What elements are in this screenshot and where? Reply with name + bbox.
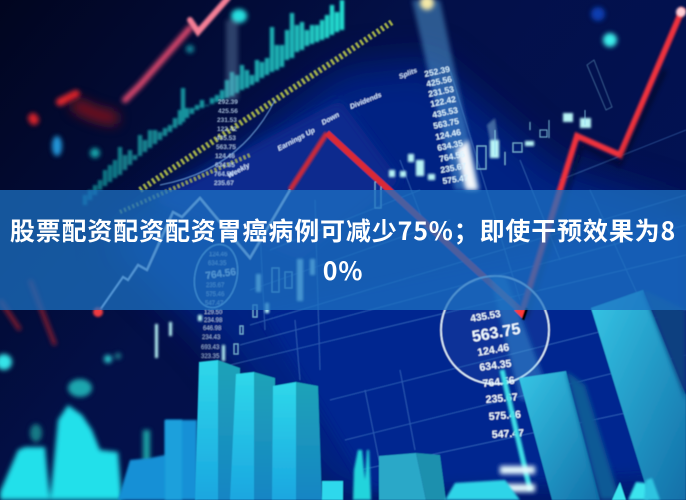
candlesticks xyxy=(155,113,591,361)
blue chart panel xyxy=(110,60,686,500)
circled number lens, small: 124.46 xyxy=(209,252,228,258)
circled number lens, large: 435.53 xyxy=(470,309,502,325)
glowing number column: 563.75 xyxy=(432,116,460,131)
circled number lens, large xyxy=(441,275,552,490)
circled number lens, small: 634.35 xyxy=(208,261,227,267)
glowing number column: 124.46 xyxy=(434,127,462,142)
glowing number column: 231.53 xyxy=(427,84,455,99)
glowing number column: 235.67 xyxy=(214,180,234,187)
circled number lens, large: 235.67 xyxy=(485,391,518,406)
big red trend line xyxy=(0,7,686,345)
circled number lens, small: 234.43 xyxy=(202,335,221,341)
large middle bar xyxy=(519,371,600,500)
glowing number column: 435.53 xyxy=(216,135,236,142)
circled number lens, small: 764.56 xyxy=(205,267,237,282)
glowing number column: 124.46 xyxy=(215,153,235,160)
glowing number column: 252.39 xyxy=(423,64,451,79)
circled number lens, small: 234.98 xyxy=(204,318,223,324)
blurred glow dots xyxy=(0,7,617,370)
chart axis labels: Down xyxy=(321,112,341,127)
red line tip xyxy=(514,310,528,318)
circled number lens, small: 693.43 xyxy=(201,345,220,351)
blurred left bars xyxy=(0,379,150,500)
chart axis labels: Dividends xyxy=(349,92,383,111)
glowing number column: 435.53 xyxy=(431,105,459,120)
title: 股票配资配资配资胃癌病例可减少75%；即使干预效果为8 xyxy=(10,212,676,248)
bar xyxy=(272,382,296,500)
blurred red line, upper left xyxy=(33,0,228,120)
glowing number column: 634.35 xyxy=(215,162,235,169)
glowing number column: 563.75 xyxy=(216,144,236,151)
title band xyxy=(0,190,686,310)
title: 0% xyxy=(323,252,363,288)
circled number lens, small: 235.67 xyxy=(206,283,225,289)
glowing number column: 764.56 xyxy=(214,171,234,178)
chart axis labels: Splits xyxy=(398,67,419,81)
glowing number column: 292.39 xyxy=(218,99,238,106)
circled number lens, large: 575.46 xyxy=(488,409,521,423)
circled number lens, large: 547.47 xyxy=(492,427,524,441)
circled number lens, large: 124.46 xyxy=(476,342,510,359)
glowing number column: 634.35 xyxy=(436,138,464,153)
glowing number column: 235.67 xyxy=(440,161,467,175)
large right bar xyxy=(591,290,686,500)
circled number lens, small: 646.98 xyxy=(203,326,222,332)
glowing number column: 231.53 xyxy=(217,117,237,124)
circled number lens, small: 575.46 xyxy=(206,292,225,298)
glowing number column: 764.56 xyxy=(438,149,466,164)
bar xyxy=(195,360,218,500)
circled number lens, large: 634.35 xyxy=(479,358,512,374)
circled number lens, small: 323.35 xyxy=(201,354,220,360)
bar xyxy=(230,372,254,500)
glowing number column: 122.42 xyxy=(429,94,457,109)
circled number lens, large: 563.75 xyxy=(471,321,522,346)
cyan bar chart, foreground xyxy=(0,290,686,500)
circled number lens, large: 764.56 xyxy=(482,375,515,390)
glowing number column: 575.47 xyxy=(442,172,469,186)
chart axis labels: Earnings Up xyxy=(277,127,317,153)
circled number lens, small: 129.50 xyxy=(204,310,223,316)
chart axis labels xyxy=(227,67,419,180)
title xyxy=(10,212,676,288)
glowing number column: 122.42 xyxy=(217,126,237,133)
glowing number column xyxy=(214,0,480,190)
chart axis labels: Weekly xyxy=(227,162,252,180)
yellow dashed trend line xyxy=(120,22,392,212)
glowing number column: 425.56 xyxy=(425,74,453,89)
teal spike chart xyxy=(85,0,342,205)
lower middle bars xyxy=(379,453,426,500)
circled number lens, small: 547.47 xyxy=(205,301,224,307)
circled number lens, small xyxy=(189,240,243,360)
glowing number column: 425.56 xyxy=(218,108,238,115)
